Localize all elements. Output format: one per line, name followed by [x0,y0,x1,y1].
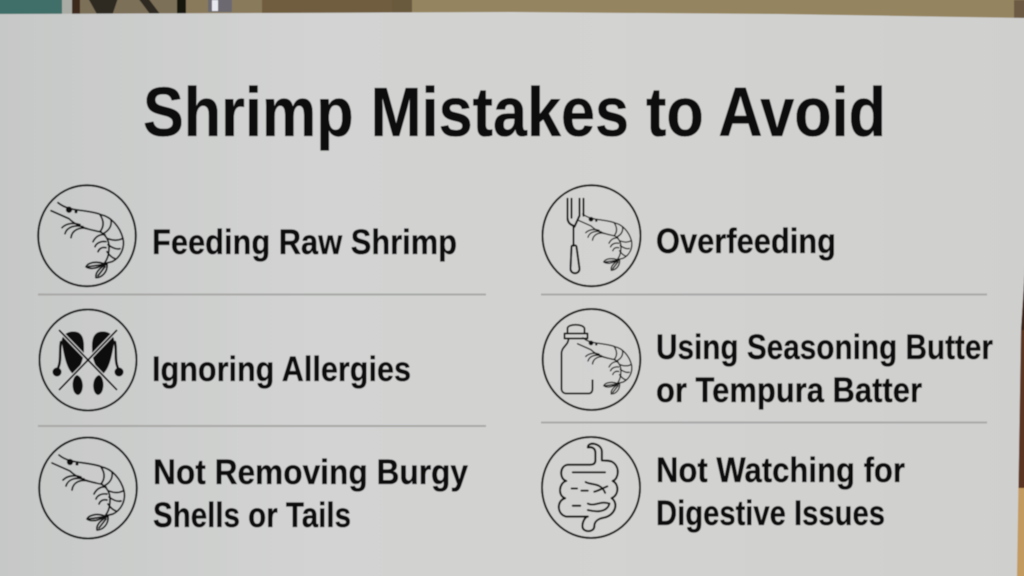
item: overfeeding [542,185,836,286]
label: not removing burgy shells or tails: Shells or Tails [153,496,351,535]
label: using seasoning butter or tempura batter: or Tempura Batter [656,371,922,410]
label: using seasoning butter or tempura batter [656,328,993,410]
icon: bottle and shrimp [543,309,640,410]
label: feeding raw shrimp: Feeding Raw Shrimp [152,223,457,262]
divider lines [38,294,987,426]
label: not watching for digestive issues: Not Watching for [656,451,905,490]
item: using seasoning butter or tempura batter [543,309,993,410]
title: Shrimp Mistakes to Avoid [143,73,886,151]
label: ignoring allergies: Ignoring Allergies [152,350,411,389]
icon: crossed out shrimp allergy [40,310,136,410]
item: not removing shells or tails [39,438,468,538]
label: not watching for digestive issues: Digestive Issues [656,494,885,533]
icon: shrimp with shell [39,438,137,538]
item: feeding raw shrimp [38,185,457,286]
item: ignoring allergies [40,310,411,410]
label: not watching for digestive issues [656,451,905,533]
icon: shrimp [38,185,136,286]
label: not removing burgy shells or tails [153,453,468,535]
label: overfeeding: Overfeeding [656,222,836,261]
icon: fork and shrimp [542,185,640,286]
icon: intestines [542,437,640,538]
label: not removing burgy shells or tails: Not Removing Burgy [153,453,468,492]
item: not watching for digestive issues [542,437,905,538]
